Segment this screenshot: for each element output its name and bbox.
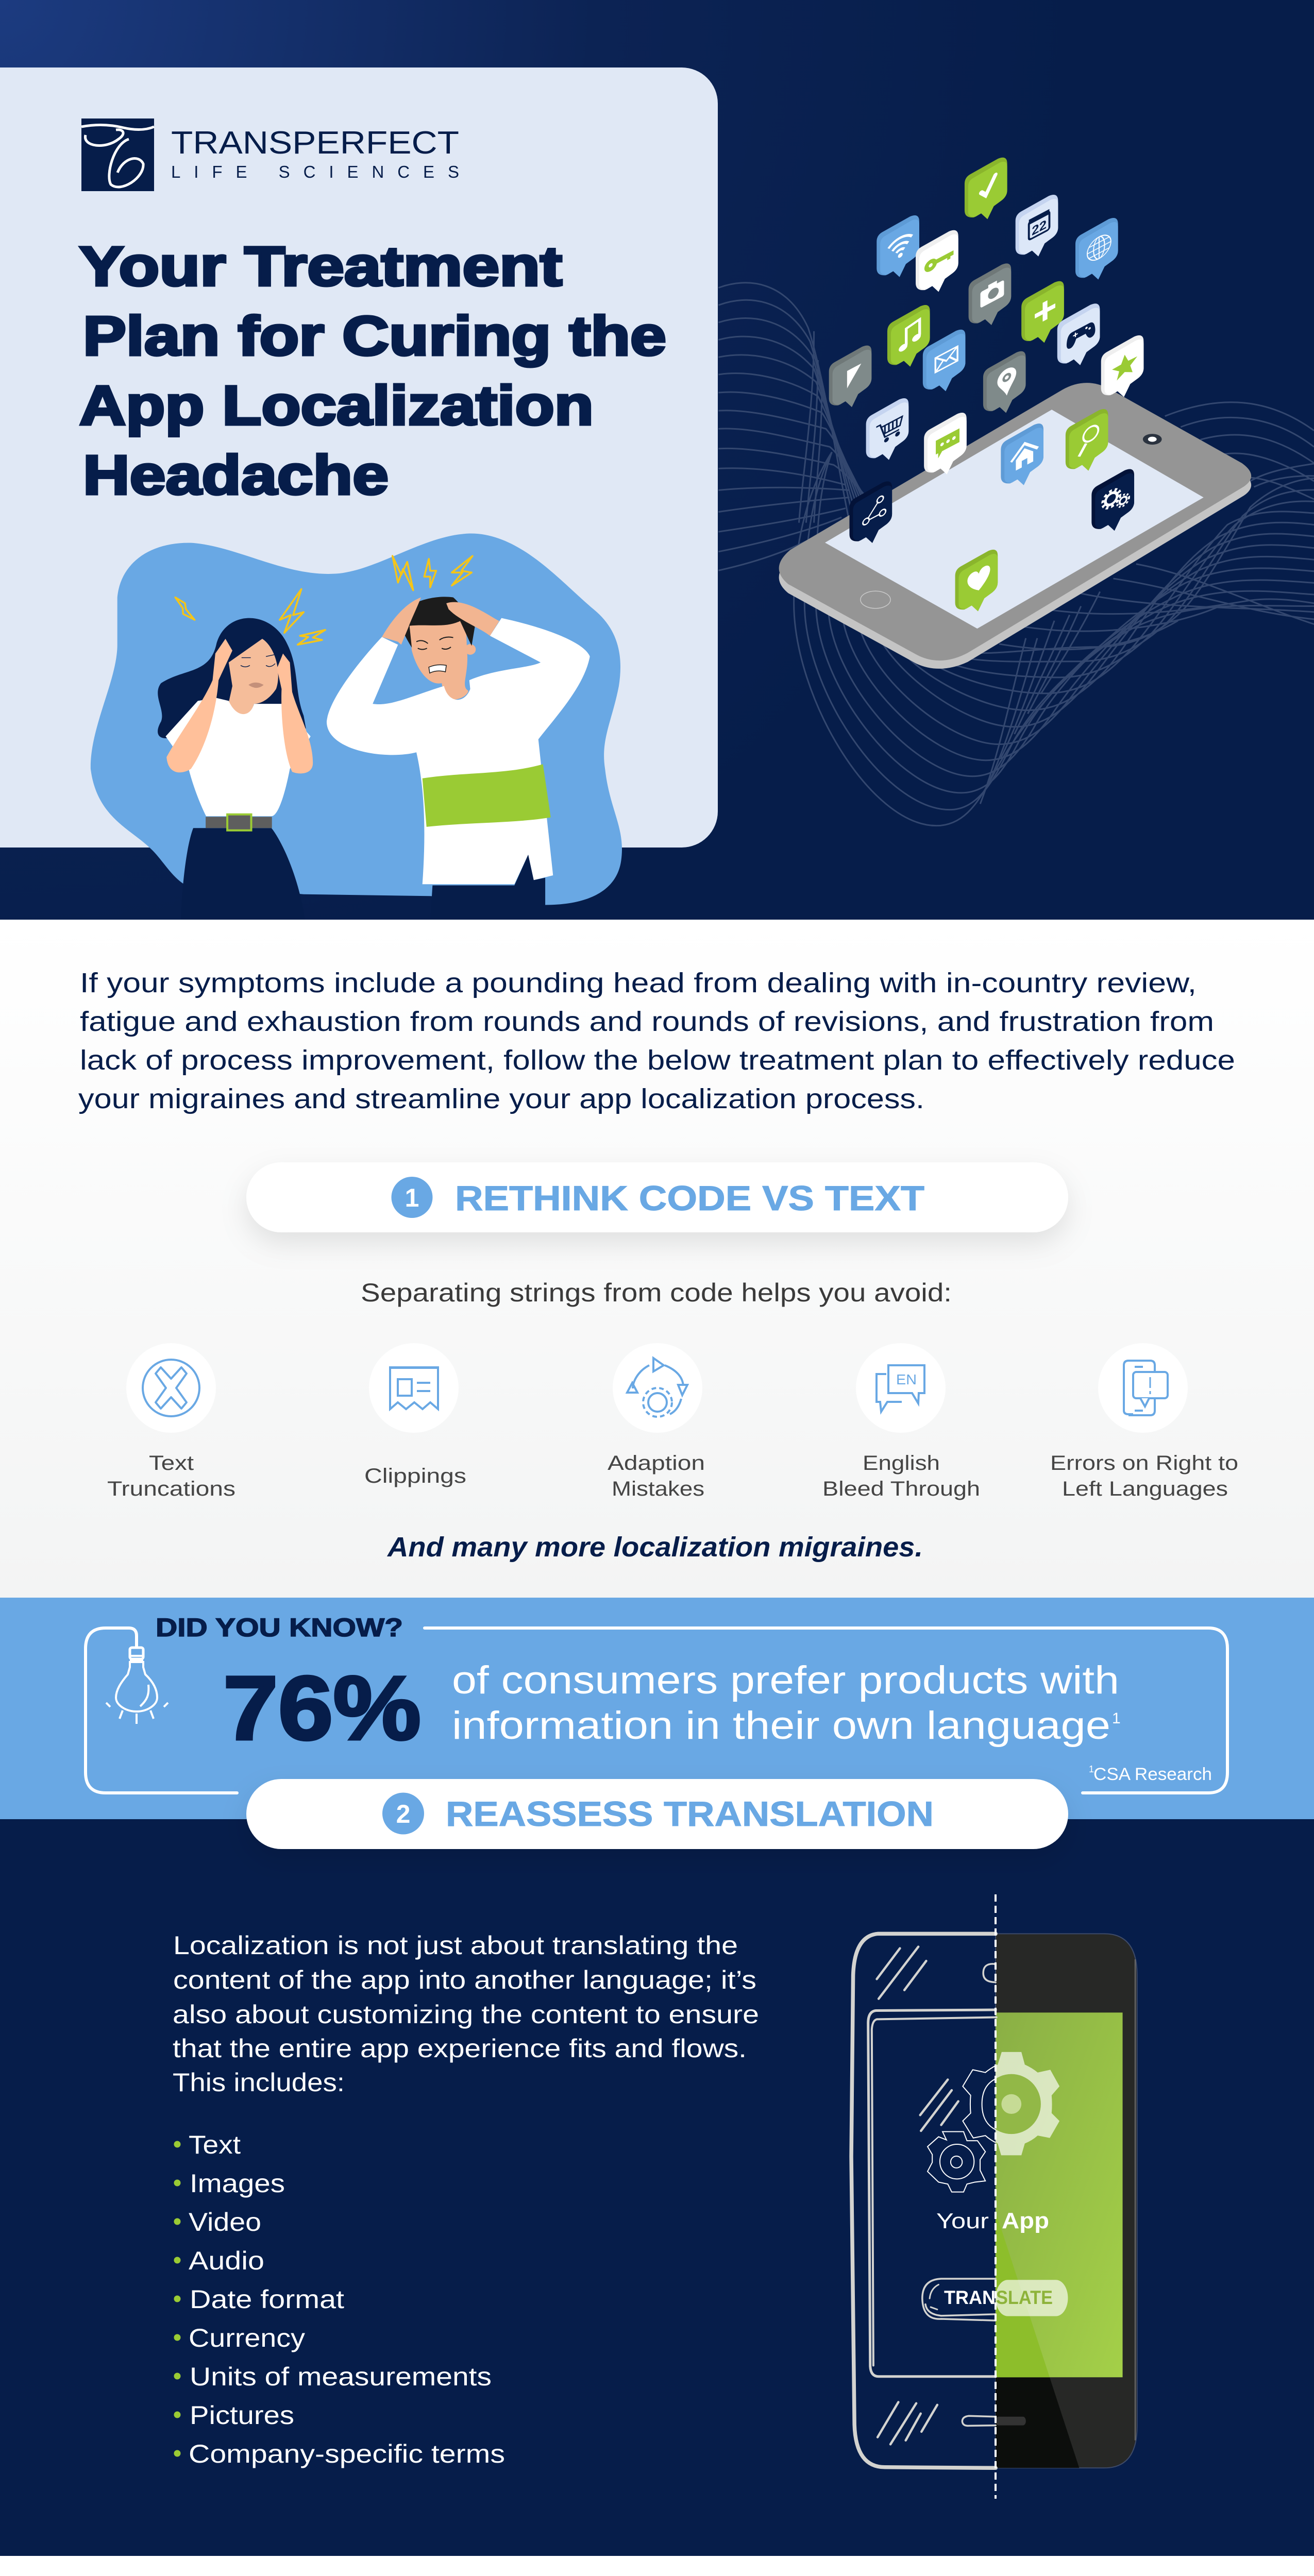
icon: key (916, 230, 958, 292)
eyebrow: DID YOU KNOW? (156, 1613, 403, 1642)
illustration: phone with floating app icons (779, 158, 1251, 669)
man (327, 597, 590, 923)
icon: gears (1091, 469, 1134, 531)
icon: location pin (983, 351, 1026, 413)
section 2 heading pill (246, 1779, 1068, 1849)
intro paragraph: your migraines and streamline your app localization process. (78, 1083, 924, 1114)
icon: wifi (877, 215, 919, 277)
intro paragraph: fatigue and exhaustion from rounds and rounds of revisions, and frustration from (80, 1006, 1214, 1037)
icon: camera (969, 263, 1011, 325)
item: english bleed through (822, 1343, 980, 1500)
section 2 paragraph: also about customizing the content to ensure (173, 2000, 759, 2029)
icon: home (1001, 423, 1043, 485)
blue blob (91, 533, 622, 905)
item: english bleed through: Bleed Through (822, 1478, 980, 1500)
subheading: Separating strings from code helps you avoid: (361, 1278, 952, 1307)
list: what localization includes: Currency (189, 2324, 305, 2352)
logo tagline: LIFE SCIENCES (171, 162, 459, 181)
list: what localization includes: Images (190, 2169, 285, 2198)
icon: gamepad (1057, 303, 1100, 365)
section 2 paragraph: This includes: (173, 2068, 345, 2097)
icon row: localization migraines (107, 1343, 1238, 1500)
section 2 paragraph (173, 1931, 759, 2097)
panel: sections 3 and 4 background (0, 2556, 1314, 2576)
heading text: REASSESS TRANSLATION (446, 1794, 934, 1834)
item: english bleed through: English (863, 1452, 940, 1475)
icon: globe (1075, 218, 1118, 280)
phone button label: SLATE (996, 2287, 1053, 2308)
callout: did you know (86, 1613, 1227, 1793)
item: errors on right to left languages: Left Languages (1062, 1478, 1228, 1500)
section 2 paragraph: that the entire app experience fits and flows. (173, 2034, 747, 2063)
icon: mail (923, 330, 965, 391)
closing line: And many more localization migraines. (386, 1532, 923, 1563)
item: clippings (364, 1343, 466, 1487)
icon: light bulb (106, 1648, 168, 1724)
phone label: Your: Your (936, 2209, 989, 2233)
stat description: information in their own language (452, 1704, 1110, 1748)
stat description: 1 (1112, 1710, 1121, 1727)
illustration: people with headaches (91, 533, 622, 923)
icon: cart (866, 398, 908, 460)
phone body (779, 383, 1251, 669)
lightning bolts (175, 556, 473, 645)
icon: calendar: 22 (1032, 217, 1047, 239)
icon: play (829, 346, 871, 407)
section 1 heading pill (246, 1162, 1068, 1232)
panel: section 2 background (0, 1819, 1314, 2556)
app icon tiles (829, 158, 1143, 612)
icon: plus (1021, 281, 1064, 343)
phone button label (944, 2287, 1053, 2308)
icon: share (849, 481, 892, 543)
item: text truncations (107, 1343, 235, 1500)
logo wordmark: TRANSPERFECT (171, 125, 459, 161)
icon: star (1101, 335, 1143, 397)
intro paragraph (78, 968, 1235, 1114)
stat description: of consumers prefer products with (452, 1658, 1119, 1702)
item: text truncations: Text (149, 1452, 194, 1475)
sketch phone half (851, 1934, 1002, 2468)
icon: chat (924, 413, 967, 474)
item: errors on right to left languages (1050, 1343, 1238, 1500)
item: clippings: Clippings (364, 1465, 466, 1487)
wave line pattern (718, 283, 1314, 826)
logo: TransPerfect Life Sciences (81, 118, 459, 191)
finished phone half (963, 1934, 1137, 2468)
panel: did you know band (0, 1598, 1314, 1819)
illustration: sketch vs finished phone (851, 1894, 1137, 2499)
list: what localization includes: Video (189, 2208, 261, 2236)
title: Your Treatment (79, 235, 562, 297)
item: adaption mistakes: Adaption (608, 1452, 705, 1475)
phone button label: TRAN (944, 2287, 996, 2308)
list: what localization includes: Company-specific terms (189, 2439, 505, 2468)
panel: hero light card (0, 67, 718, 848)
title: Headache (83, 444, 389, 506)
item: english bleed through: EN (896, 1371, 917, 1387)
section 2 paragraph: Localization is not just about translating the (173, 1931, 738, 1960)
logo mark (81, 118, 154, 191)
item: text truncations: Truncations (107, 1478, 235, 1500)
list: what localization includes: Date format (190, 2285, 344, 2314)
section 2 paragraph: content of the app into another language; it’s (173, 1965, 756, 1994)
number badge 2 (382, 1793, 424, 1834)
number badge 1: 1 (405, 1183, 419, 1212)
title (79, 235, 666, 506)
item: adaption mistakes: Mistakes (612, 1478, 704, 1500)
list: what localization includes: Audio (189, 2246, 264, 2275)
intro paragraph: lack of process improvement, follow the below treatment plan to effectively reduce (80, 1045, 1235, 1076)
list: what localization includes: Units of measurements (190, 2362, 492, 2391)
panel: hero background (0, 0, 1314, 920)
list: what localization includes (174, 2130, 505, 2468)
number badge 2: 2 (396, 1800, 410, 1828)
list: what localization includes: Text (189, 2130, 241, 2159)
woman (158, 618, 313, 923)
stat: 76%: 76% (223, 1658, 421, 1759)
list: what localization includes: Pictures (190, 2401, 294, 2430)
source note: CSA Research (1093, 1765, 1212, 1784)
panel: section 1 background (0, 920, 1314, 1598)
item: errors on right to left languages: Errors on Right to (1050, 1452, 1238, 1475)
intro paragraph: If your symptoms include a pounding head from dealing with in-country review, (80, 968, 1197, 998)
stat description (452, 1658, 1121, 1748)
icon: calendar (1016, 195, 1058, 257)
phone label: App: App (1002, 2208, 1049, 2233)
source note: 1 (1089, 1764, 1094, 1774)
heading text: RETHINK CODE VS TEXT (455, 1179, 924, 1218)
icon: check (965, 158, 1007, 219)
number badge 1 (392, 1177, 433, 1218)
callout frame (86, 1628, 1227, 1793)
icon: search (1066, 409, 1108, 471)
item: adaption mistakes (608, 1343, 705, 1500)
icon: music (887, 305, 930, 367)
title: Plan for Curing the (83, 304, 666, 367)
icon: heart (955, 550, 998, 612)
title: App Localization (79, 374, 594, 436)
